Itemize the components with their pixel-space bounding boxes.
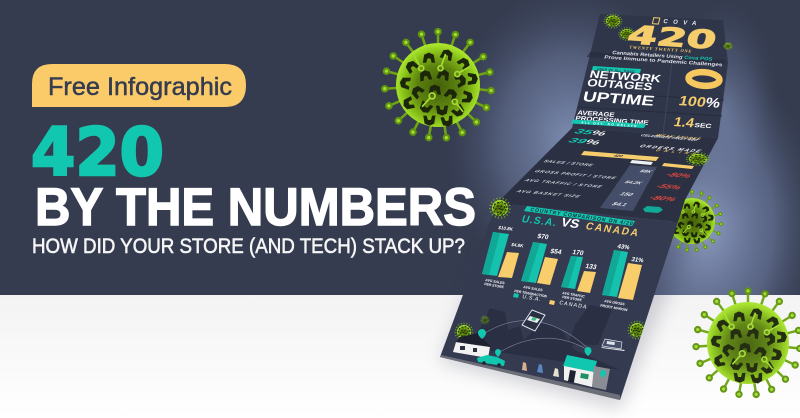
table: store comparison: -80% xyxy=(663,171,694,179)
icon: people xyxy=(522,362,559,377)
title: 420: 420 xyxy=(31,114,164,191)
icon: virus top left xyxy=(382,29,494,141)
table: store comparison: 150 xyxy=(617,192,635,197)
icon: virus on fold xyxy=(686,152,710,166)
table: store comparison: $8K xyxy=(637,170,654,174)
icon: virus on poster edge xyxy=(489,197,511,219)
city silhouette xyxy=(450,305,620,370)
text: orders: ONLINE xyxy=(653,149,699,156)
table: store comparison: -55% xyxy=(653,183,684,191)
text: orders: WEAK STORES xyxy=(653,134,703,141)
icon: virus bottom right xyxy=(693,288,800,397)
chip: country comparison: COUNTRY COMPARISON ON 4/20 xyxy=(529,207,633,227)
legend xyxy=(513,293,588,311)
stat: network outages: OUTAGES xyxy=(586,77,654,93)
table: store comparison: AVG TRAFFIC / STORE xyxy=(522,179,604,189)
icon: small viruses xyxy=(604,14,733,50)
table: store comparison: GROSS PROFIT / STORE xyxy=(532,170,618,180)
heading: 420 twenty twenty one: TWENTY TWENTY ONE xyxy=(629,45,692,54)
table: store comparison: $4.1 xyxy=(609,202,629,207)
table: store comparison: AVG BASKET SIZE xyxy=(514,190,582,199)
text: intro: Cannabis Retailers Using Cova POS xyxy=(612,50,714,63)
text: intro: Prove Immune to Pandemic Challenges xyxy=(604,55,723,68)
subtitle: HOW DID YOUR STORE (AND TECH) STACK UP? xyxy=(32,234,465,258)
stat: uptime: 100% xyxy=(677,93,722,111)
table: store comparison: -80% xyxy=(646,194,679,202)
icon: teal car xyxy=(643,206,663,213)
icon: laptop xyxy=(601,339,625,351)
heading: 420 twenty twenty one: 420 xyxy=(625,19,720,55)
ground strip xyxy=(440,355,620,400)
bars: avg sales per store xyxy=(482,225,525,289)
text: orders: CELEBRATE FIRST 4/20 xyxy=(638,134,699,142)
legend: U.S.A. xyxy=(521,294,541,303)
heading: 420 twenty twenty one xyxy=(625,19,720,55)
heading: usa vs canada xyxy=(520,214,640,239)
icon: car xyxy=(477,355,505,367)
badge: free infographic xyxy=(32,64,246,107)
stat: average processing time: PROCESSING TIME xyxy=(575,115,649,127)
stat: percentages: 35% xyxy=(571,128,610,138)
chip: yellow 420 bar xyxy=(581,151,659,161)
bars: avg sales per transaction xyxy=(514,233,563,299)
text: orders: ORDERS MADE xyxy=(637,145,702,154)
title: by the numbers: BY THE NUMBERS xyxy=(35,178,476,237)
icon: virus behind poster xyxy=(661,190,723,252)
stat: network outages xyxy=(586,69,720,93)
bars: avg traffic per store xyxy=(561,249,598,302)
stat: uptime xyxy=(581,89,722,111)
heading: usa vs canada: U.S.A. xyxy=(520,214,558,229)
table: store comparison xyxy=(514,160,694,211)
bars: avg gross profit margin: 31% xyxy=(630,256,645,264)
bars: avg sales per transaction: $54 xyxy=(549,248,563,256)
icon: location pins xyxy=(478,329,606,378)
icon: house xyxy=(453,333,491,358)
text: intro xyxy=(604,50,723,68)
poster shadow xyxy=(440,220,690,410)
bars: avg gross profit margin: AVG GROSS xyxy=(604,299,626,307)
chip: yellow 420 bar: 420 xyxy=(611,154,625,158)
bars: avg sales per transaction: PER TRANSACTION xyxy=(514,289,548,299)
bars: avg gross profit margin: PROFIT MARGIN xyxy=(600,304,628,312)
bars: avg sales per transaction: AVG SALES xyxy=(523,285,544,292)
bars: avg traffic per store: PER STORE xyxy=(562,295,583,302)
chip: teal label xyxy=(592,66,641,74)
stat: percentages: 39% xyxy=(565,137,604,147)
stat: average processing time: SEC xyxy=(694,122,713,130)
badge: free infographic: Free Infographic xyxy=(48,73,232,101)
bars: avg gross profit margin xyxy=(600,243,645,312)
table: store comparison: $4.2K xyxy=(622,181,644,186)
panel: country comparison xyxy=(440,197,678,400)
bars: avg gross profit margin: 43% xyxy=(616,243,631,251)
bars: avg sales per store: $4.8K xyxy=(511,242,525,248)
arcs xyxy=(482,321,590,353)
heading: usa vs canada: VS xyxy=(559,215,582,231)
stat: average processing time: 1.4 xyxy=(672,114,697,130)
bars: avg traffic per store: 170 xyxy=(571,249,585,257)
bars: avg sales per store: AVG SALES xyxy=(485,278,506,285)
stat: percentages xyxy=(565,128,610,147)
chip: teal label: USER OF ALL 'BAGS' xyxy=(597,67,636,74)
bars: avg sales per store: $10.8K xyxy=(498,225,514,232)
panel: middle fold xyxy=(497,128,718,222)
heading: usa vs canada: CANADA xyxy=(584,221,640,239)
icon: viruses on skyline xyxy=(455,315,646,341)
logo: cova: COVA xyxy=(663,18,698,27)
legend: CANADA xyxy=(558,300,588,311)
bars: avg traffic per store: 133 xyxy=(584,263,598,271)
stat: average processing time: ALL DAY. NO DELAYS xyxy=(581,121,638,128)
infographic poster xyxy=(440,14,733,400)
bars: avg traffic per store: AVG TRAFFIC xyxy=(562,291,586,299)
stat: average processing time: AVERAGE xyxy=(577,110,615,119)
table: store comparison: SALES / STORE xyxy=(541,160,595,168)
icon: store xyxy=(563,355,610,390)
stat: uptime: UPTIME xyxy=(581,89,656,110)
bars: avg sales per store: PER STORE xyxy=(484,282,505,289)
text: orders xyxy=(637,134,703,156)
bars: avg sales per transaction: $70 xyxy=(536,233,550,241)
bar chart xyxy=(482,225,645,312)
panel: top fold xyxy=(571,14,733,138)
stat: network outages: NETWORK xyxy=(588,69,663,85)
icon: phone xyxy=(522,310,545,331)
stat: average processing time xyxy=(571,110,713,130)
